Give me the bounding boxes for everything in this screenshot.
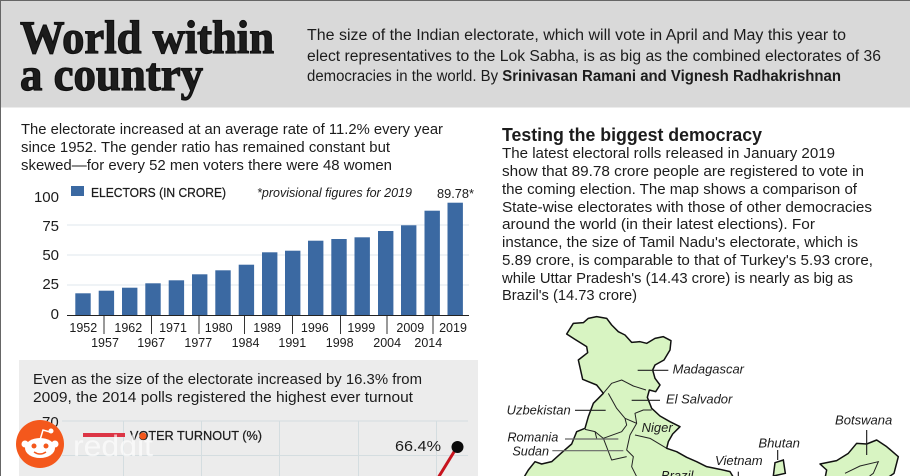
header standfirst text: [307, 27, 881, 85]
map: country labels: Vietnam: [715, 453, 763, 468]
map: country labels: Romania: [507, 430, 558, 445]
map: country labels: Sudan: [512, 444, 549, 459]
turnout line: [438, 447, 457, 476]
body text: testing the biggest democracy: around the world (in their latest elections). For: [502, 217, 815, 233]
heading: testing the biggest democracy: Testing the biggest democracy: [502, 125, 762, 145]
2014 data point: [452, 441, 464, 453]
y axis labels: 50: [42, 247, 59, 264]
header standfirst text: The size of the Indian electorate, which will vote in April and May this year to: [307, 27, 846, 44]
body text: testing the biggest democracy: Brazil's (14.73 crore): [502, 288, 637, 304]
provisional figures note: *provisional figures for 2019: [257, 186, 412, 200]
x axis year labels: 1984: [232, 336, 259, 350]
turnout text: 2009, the 2014 polls registered the highest ever turnout: [33, 390, 413, 406]
header standfirst text: elect representatives to the Lok Sabha, is as big as the combined electorates of 36: [307, 48, 881, 65]
x axis year labels: 1991: [278, 336, 306, 350]
map: Sikkim: [773, 460, 785, 476]
intro text: electorate growth: since 1952. The gender ratio has remained constant but: [21, 140, 390, 156]
map: country labels: Uzbekistan: [507, 402, 571, 417]
x axis year labels: 1996: [301, 321, 329, 335]
turnout line chart: [42, 414, 468, 476]
x axis year labels: 2009: [396, 321, 424, 335]
wordmark: reddit: reddit: [73, 430, 154, 463]
map: leader lines: [552, 370, 867, 476]
x axis year labels: 1967: [137, 336, 165, 350]
y axis labels: 0: [51, 306, 59, 323]
chart legend: ELECTORS (IN CRORE): [91, 185, 226, 200]
66.4% value label: 66.4%: [395, 438, 441, 455]
x axis year labels: 1952: [69, 321, 97, 335]
map of India: [507, 317, 898, 476]
body text: testing the biggest democracy: instance, the size of Tamil Nadu's electorate, which is: [502, 235, 858, 251]
x axis year labels: 1977: [184, 336, 212, 350]
bars: [75, 203, 463, 315]
body text: testing the biggest democracy: show that 89.78 crore people are registered to vote in: [502, 164, 864, 180]
reddit watermark: [16, 420, 154, 468]
map: state borders: [585, 380, 667, 476]
title: [20, 12, 274, 101]
x axis year labels: 2004: [373, 336, 401, 350]
bar chart: electors in crore: [34, 185, 474, 350]
body text: testing the biggest democracy: [501, 146, 873, 304]
header band: [0, 0, 910, 108]
map: country labels: Niger: [642, 420, 673, 435]
body text: testing the biggest democracy: The latest electoral rolls released in January 2019: [502, 146, 835, 162]
panel: voter turnout: [19, 360, 478, 476]
x axis year labels: 1980: [205, 321, 233, 335]
y axis labels: 75: [42, 218, 59, 235]
turnout text: [33, 372, 422, 406]
2019 value label: 89.78*: [437, 187, 474, 201]
map: country labels: Bhutan: [758, 435, 800, 450]
intro text: electorate growth: [21, 122, 443, 174]
map: country labels: Madagascar: [673, 361, 745, 376]
body text: testing the biggest democracy: 5.89 crore, is comparable to that of Turkey's 5.93 crore,: [502, 253, 873, 269]
header standfirst text: democracies in the world. By Srinivasan Ramani and Vignesh Radhakrishnan: [307, 68, 841, 85]
y axis labels: 25: [42, 276, 59, 293]
title: a country: [20, 49, 203, 101]
intro text: electorate growth: skewed—for every 52 men voters there were 48 women: [21, 158, 392, 174]
map: country labels: Botswana: [835, 412, 892, 427]
x axis year labels: 1957: [91, 336, 119, 350]
x axis year labels: 1962: [114, 321, 142, 335]
title: World within: [20, 12, 274, 64]
icon: reddit logo: [16, 420, 64, 468]
body text: testing the biggest democracy: the coming election. The map shows a comparison of: [502, 182, 858, 198]
y axis labels: [34, 189, 59, 323]
x axis year labels: 1989: [253, 321, 281, 335]
map: country labels: El Salvador: [666, 391, 733, 406]
intro text: electorate growth: The electorate increased at an average rate of 11.2% every year: [21, 122, 443, 138]
x axis year labels: 2014: [414, 336, 442, 350]
turnout legend: VOTER TURNOUT (%): [130, 428, 262, 443]
map: northeast: [820, 440, 898, 476]
x axis year labels: [69, 321, 467, 350]
map: mainland outline: [523, 317, 734, 476]
x axis year labels: 1971: [159, 321, 187, 335]
x axis year labels: 2019: [439, 321, 467, 335]
turnout line chart: 70: [42, 414, 59, 431]
turnout text: Even as the size of the electorate increased by 16.3% from: [33, 372, 422, 388]
y axis labels: 100: [34, 189, 59, 206]
map: country labels: [507, 361, 892, 476]
x axis year labels: 1999: [347, 321, 375, 335]
x axis year labels: 1998: [326, 336, 354, 350]
body text: testing the biggest democracy: while Uttar Pradesh's (14.43 crore) is nearly as big as: [501, 271, 853, 287]
body text: testing the biggest democracy: State-wise electorates with those of other democracies: [502, 200, 872, 216]
